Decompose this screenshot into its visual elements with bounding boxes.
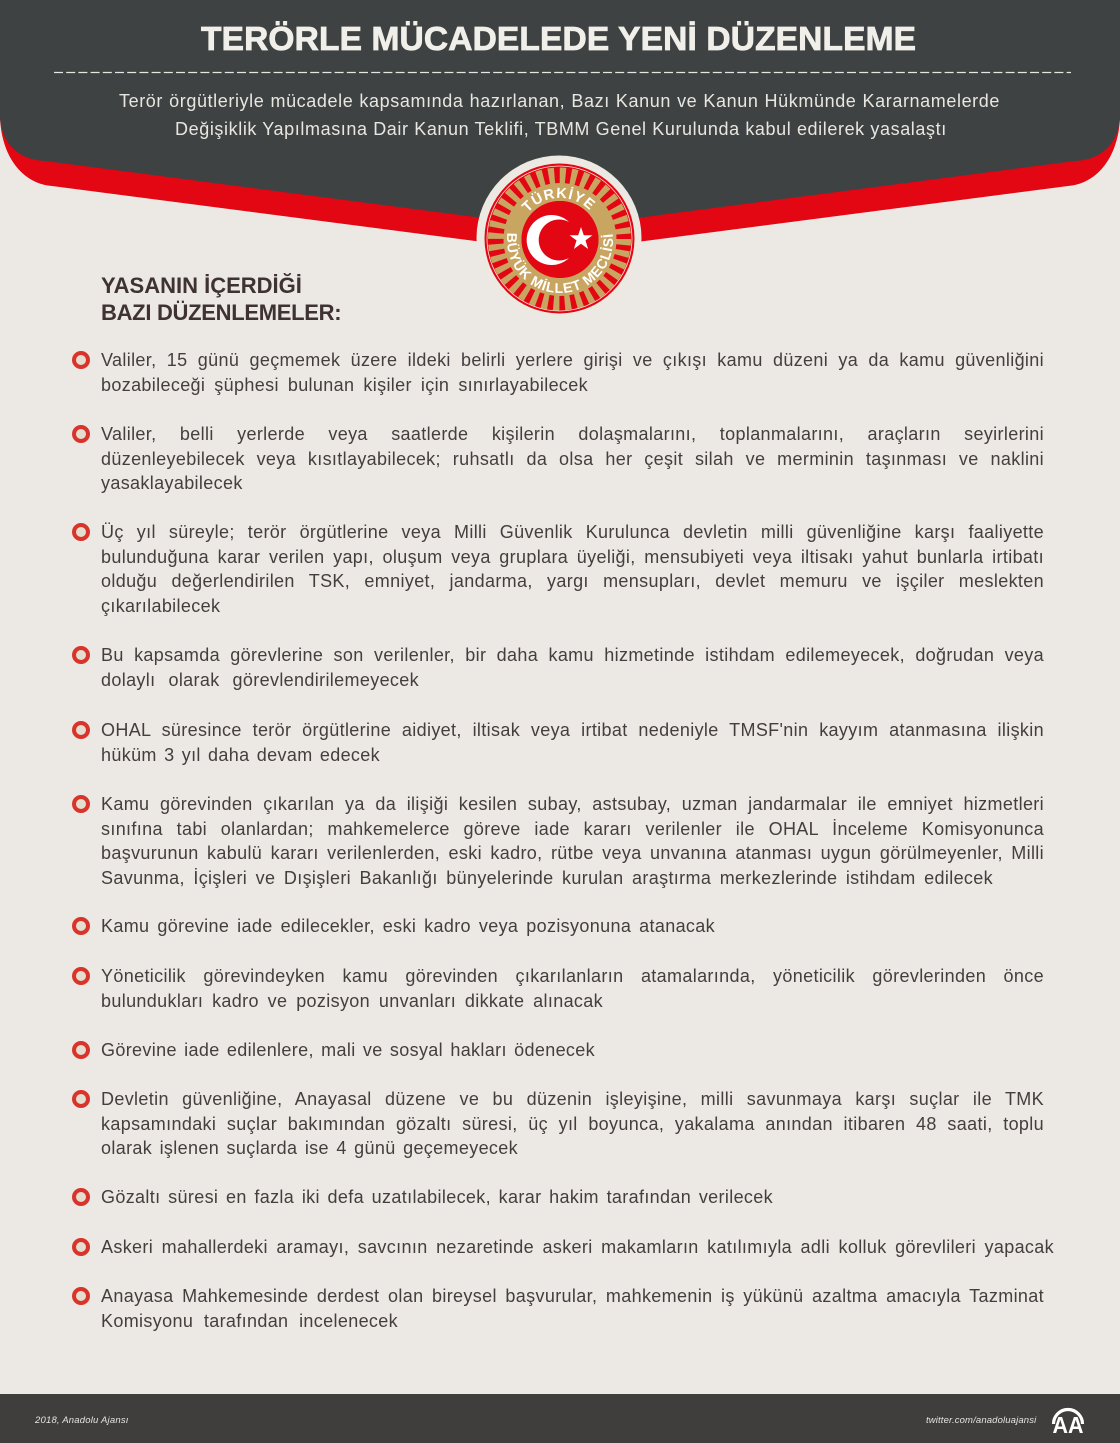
list item 6: Kamu görevinden çıkarılan ya da ilişiği kesilen subay, astsubay, uzman jandarmalar ile emniyet hizmetleri: [101, 794, 1044, 814]
footer: [0, 1394, 1120, 1443]
list item 8: [72, 966, 1044, 1011]
footer twitter link: twitter.com/anadoluajansi: [926, 1415, 1036, 1426]
subtitle: Terör örgütleriyle mücadele kapsamında hazırlanan, Bazı Kanun ve Kanun Hükmünde Kararnamelerde: [119, 91, 1000, 111]
list item 11: Gözaltı süresi en fazla iki defa uzatılabilecek, karar hakim tarafından verilecek: [101, 1187, 773, 1207]
list item 13: Komisyonu tarafından incelenecek: [101, 1311, 398, 1331]
subtitle: Değişiklik Yapılmasına Dair Kanun Teklifi, TBMM Genel Kurulunda kabul edilerek yasalaştı: [175, 118, 947, 138]
footer copyright: 2018, Anadolu Ajansı: [35, 1415, 129, 1426]
list item 10: kapsamındaki suçlar bakımından gözaltı süresi, üç yıl boyunca, yakalama anından itibaren 48 saati, toplu: [101, 1114, 1044, 1134]
list item 4: Bu kapsamda görevlerine son verilenler, bir daha kamu hizmetinde istihdam edilemeyecek, doğrudan veya: [101, 645, 1044, 665]
list item 6: sınıfına tabi olanlardan; mahkemelerce göreve iade kararı verilenler ile OHAL İnceleme Komisyonunca: [101, 819, 1044, 839]
list item 1: Valiler, 15 günü geçmemek üzere ildeki belirli yerlere girişi ve çıkışı kamu düzeni ya da kamu güvenliğini: [101, 350, 1044, 370]
list item 1: bozabileceği şüphesi bulunan kişiler için sınırlayabilecek: [101, 375, 588, 395]
list item 1: [72, 350, 1044, 395]
title: TERÖRLE MÜCADELEDE YENİ DÜZENLEME: [201, 21, 916, 58]
list item 2: düzenleyebilecek veya kısıtlayabilecek; ruhsatlı da olsa her çeşit silah ve merminin taşınması ve naklini: [101, 449, 1044, 469]
header background with red band: [0, 0, 1120, 242]
list item 5: [72, 720, 1044, 765]
subtitle: [119, 91, 1000, 139]
icon: parliament seal: [476, 156, 642, 314]
list item 6: Savunma, İçişleri ve Dışişleri Bakanlığı bünyelerinde kurulan araştırma merkezlerinde istihdam edilecek: [101, 868, 993, 888]
list item 3: bulunduğuna karar verilen yapı, oluşum veya gruplara üyeliği, mensubiyeti veya iltisakı yahut bunlarla irtibatı: [101, 547, 1044, 567]
list item 9: Görevine iade edilenlere, mali ve sosyal hakları ödenecek: [101, 1040, 595, 1060]
list item 5: hüküm 3 yıl daha devam edecek: [101, 745, 380, 765]
list item 2: [72, 424, 1044, 493]
list item 5: OHAL süresince terör örgütlerine aidiyet, iltisak veya irtibat nedeniyle TMSF'nin kayyım atanmasına ilişkin: [101, 720, 1044, 740]
list item 4: dolaylı olarak görevlendirilemeyecek: [101, 670, 419, 690]
list item 2: yasaklayabilecek: [101, 473, 243, 493]
section heading: BAZI DÜZENLEMELER:: [101, 300, 341, 325]
list item 10: Devletin güvenliğine, Anayasal düzene ve bu düzenin işleyişine, milli savunmaya karşı suçlar ile TMK: [101, 1089, 1044, 1109]
list item 7: Kamu görevine iade edilecekler, eski kadro veya pozisyonuna atanacak: [101, 916, 715, 936]
list item 3: Üç yıl süreyle; terör örgütlerine veya Milli Güvenlik Kurulunca devletin milli güvenliğine karşı faaliyette: [101, 522, 1044, 542]
list item 13: [72, 1286, 1044, 1331]
icon: parliament seal: TÜRKİYE: [521, 186, 596, 210]
list item 10: olarak işlenen suçlarda ise 4 günü geçemeyecek: [101, 1138, 518, 1158]
list item 8: bulundukları kadro ve pozisyon unvanları dikkate alınacak: [101, 991, 603, 1011]
icon: parliament seal: BÜYÜK MİLLET MECLİSİ: [507, 234, 614, 293]
list item 3: olduğu değerlendirilen TSK, emniyet, jandarma, yargı mensupları, devlet memuru ve işçiler meslekten: [101, 571, 1044, 591]
list item 12: Askeri mahallerdeki aramayı, savcının nezaretinde askeri makamların katılımıyla adli kolluk görevlileri yapacak: [101, 1237, 1054, 1257]
list item 6: [72, 794, 1044, 888]
section heading: YASANIN İÇERDİĞİ: [101, 273, 302, 298]
list item 3: [72, 522, 1044, 616]
list item 2: Valiler, belli yerlerde veya saatlerde kişilerin dolaşmalarını, toplanmalarını, araçların seyirlerini: [101, 424, 1044, 444]
list item 6: başvurunun kabulü kararı verilenlerden, eski kadro, rütbe veya unvanına atanması uygun görülmeyenler, Milli: [101, 843, 1044, 863]
list item 8: Yöneticilik görevindeyken kamu görevinden çıkarılanların atamalarında, yöneticilik görevlerinden önce: [101, 966, 1044, 986]
list item 4: [72, 645, 1044, 690]
section heading: [101, 273, 341, 325]
list item 10: [72, 1089, 1044, 1158]
list item 13: Anayasa Mahkemesinde derdest olan bireysel başvurular, mahkemenin iş yükünü azaltma amacıyla Tazminat: [101, 1286, 1044, 1306]
list item 3: çıkarılabilecek: [101, 596, 220, 616]
